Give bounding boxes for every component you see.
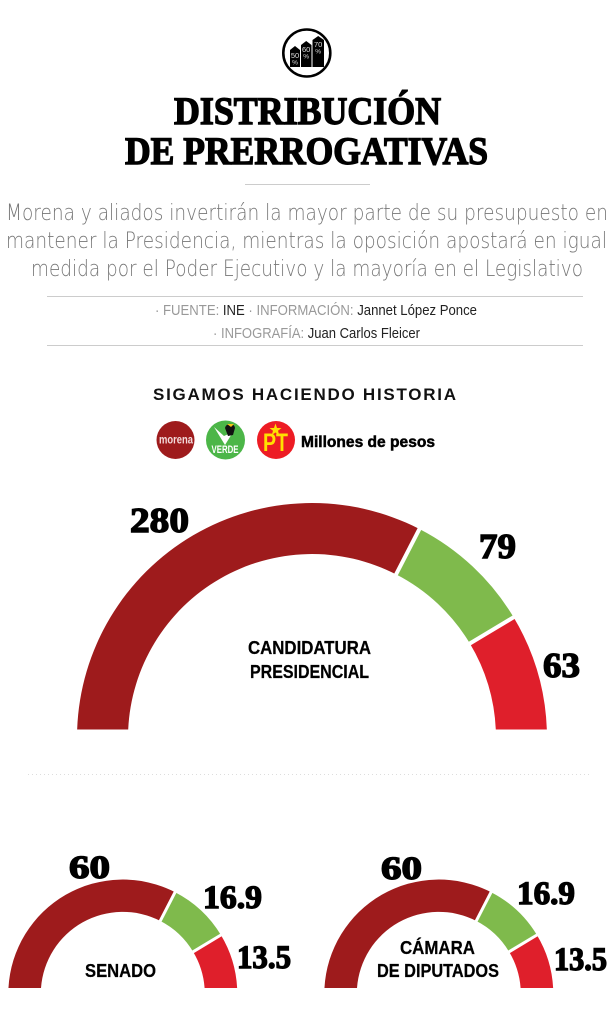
icon: percentage bars in a circle: % (292, 60, 298, 66)
chart label: CANDIDATURA (248, 638, 371, 658)
title: DE PRERROGATIVAS (125, 130, 488, 173)
title: DISTRIBUCIÓN (174, 89, 441, 133)
coalition heading: SIGAMOS HACIENDO HISTORIA (153, 385, 456, 404)
credits: · INFOGRAFÍA: Juan Carlos Fleicer (213, 325, 420, 342)
value: 13.5: 13.5 (237, 940, 291, 976)
value: 60: 60 (69, 850, 110, 886)
icon: PT logo (257, 421, 295, 459)
value: 16.9: 16.9 (517, 876, 575, 912)
value: 63: 63 (543, 646, 580, 685)
value: 16.9: 16.9 (203, 880, 262, 916)
chart: camara de diputados (324, 851, 607, 988)
chart label (248, 638, 371, 682)
chart: candidatura presidencial (77, 501, 580, 730)
chart label: DE DIPUTADOS (377, 961, 499, 981)
icon: morena logo: morena (159, 432, 193, 446)
icon: PT logo: PT (263, 429, 288, 457)
unit label: Millones de pesos (301, 434, 435, 451)
chart label: SENADO (85, 961, 156, 981)
icon: percentage bars in a circle (283, 30, 330, 76)
subtitle text block (6, 201, 608, 282)
chart: senado (8, 850, 291, 988)
icon: percentage bars in a circle: % (315, 48, 321, 56)
value: 79: 79 (479, 527, 516, 566)
chart label (377, 937, 499, 981)
credits (155, 302, 477, 342)
chart label: PRESIDENCIAL (250, 662, 369, 682)
icon: percentage bars in a circle: % (303, 54, 309, 60)
value: 60: 60 (381, 851, 422, 887)
chart label: CÁMARA (400, 937, 475, 958)
icon: morena logo (156, 421, 194, 459)
credits: · FUENTE: INE · INFORMACIÓN: Jannet López Ponce (155, 302, 477, 319)
legend: party logos and unit (156, 420, 435, 460)
icon: percentage bars in a circle: 50 (291, 51, 299, 60)
title (125, 89, 488, 173)
icon: percentage bars in a circle: 70 (314, 40, 322, 49)
value: 13.5: 13.5 (554, 942, 607, 978)
icon: verde logo: VERDE (212, 444, 238, 456)
icon: verde logo (206, 420, 245, 460)
icon: percentage bars in a circle: 60 (302, 45, 310, 54)
value: 280: 280 (130, 501, 189, 540)
